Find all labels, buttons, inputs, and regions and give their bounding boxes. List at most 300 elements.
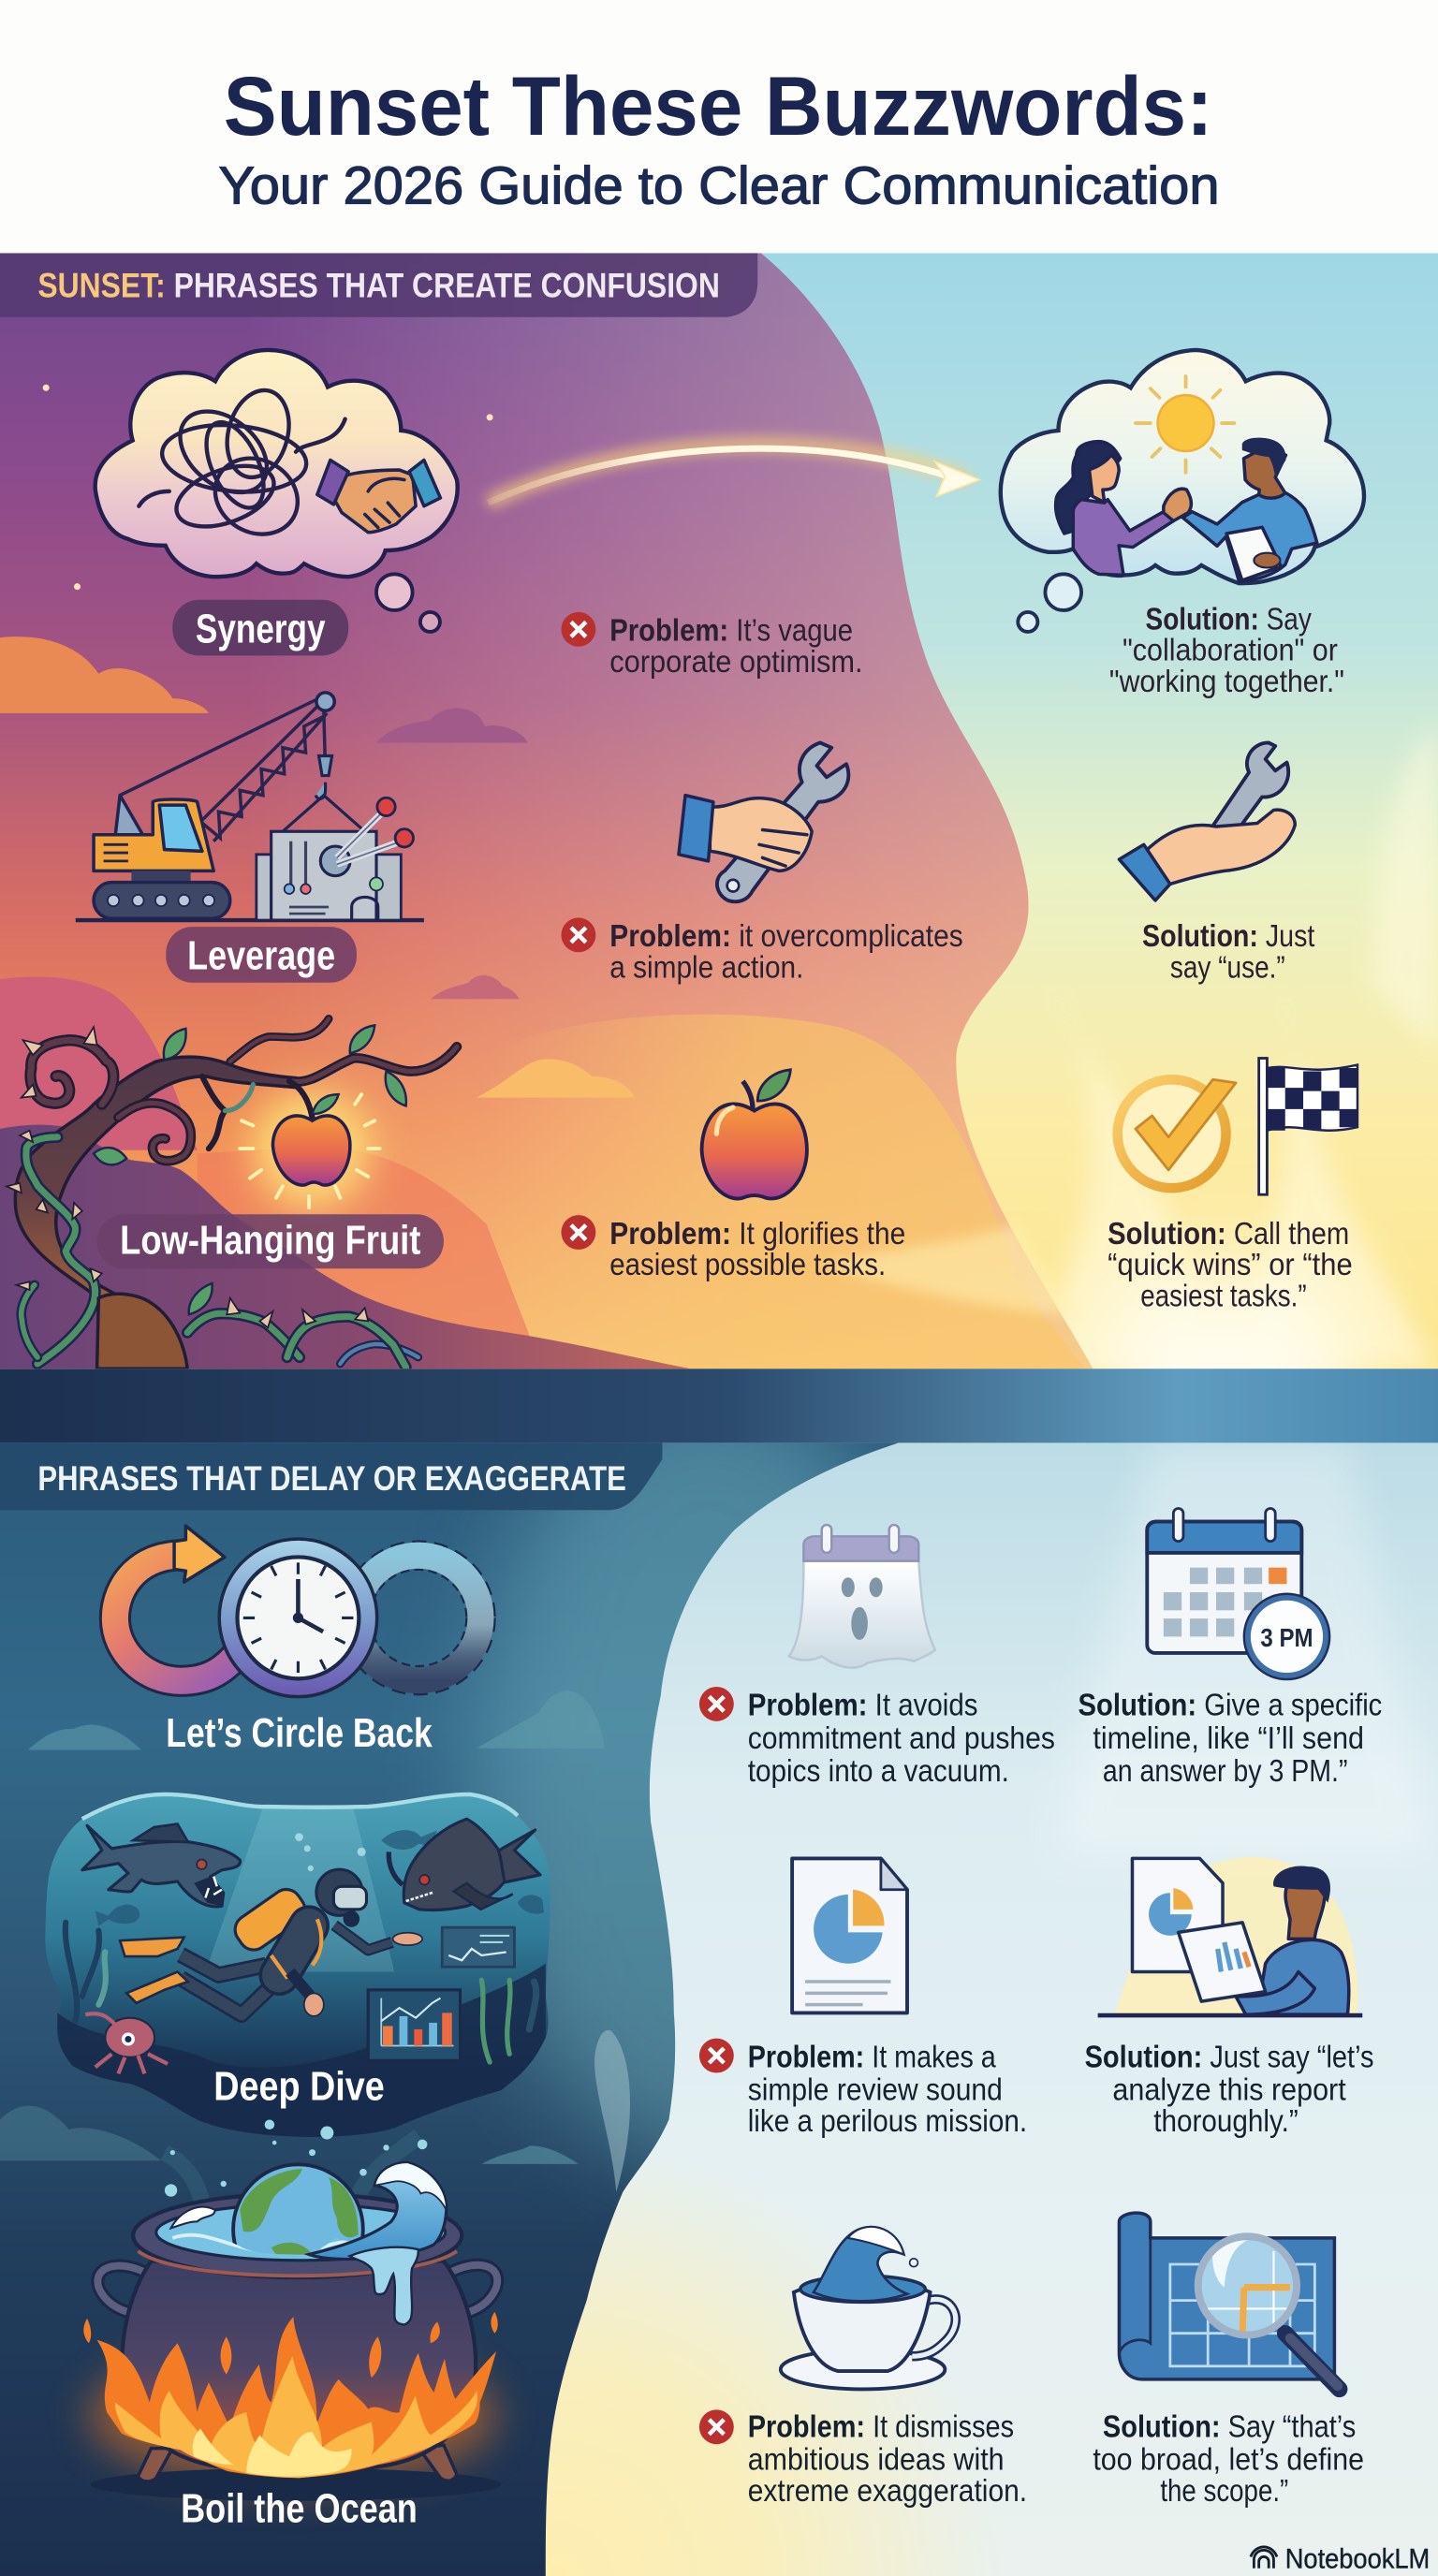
fin one xyxy=(120,1938,184,1956)
arrow head xyxy=(174,1526,225,1582)
cloud: orange left xyxy=(0,637,209,713)
apple highlight xyxy=(716,1107,733,1134)
lower hand xyxy=(304,1993,324,2016)
seaweed xyxy=(66,1923,536,2062)
torso outline xyxy=(279,1925,309,1975)
roots xyxy=(97,1294,187,1368)
leg two xyxy=(181,1979,279,2014)
apple glow xyxy=(253,1091,372,1209)
mouth xyxy=(406,1893,433,1901)
problem: deep dive xyxy=(699,2039,1027,2139)
x icon xyxy=(699,2409,734,2444)
line 2: a simple action. xyxy=(609,950,803,985)
icon: person analysing a report xyxy=(1098,1857,1362,2015)
fin two xyxy=(126,1972,188,2003)
green vine left xyxy=(187,1313,300,1357)
x icon xyxy=(561,1215,595,1250)
line 2: “quick wins” or “the xyxy=(1108,1248,1353,1282)
blue cuff xyxy=(409,461,440,506)
problem: boil the ocean xyxy=(699,2409,1027,2509)
glowing apple xyxy=(272,1116,350,1185)
line 3: easiest tasks.” xyxy=(1140,1280,1307,1314)
wrench ring xyxy=(727,880,739,892)
man body xyxy=(1182,493,1317,581)
background hill: purple xyxy=(0,1125,690,1368)
legs xyxy=(138,2445,457,2481)
cab window xyxy=(159,805,202,851)
line 2: commitment and pushes xyxy=(748,1721,1055,1756)
icon: storm in a teacup xyxy=(781,2227,956,2389)
water in cup xyxy=(800,2276,925,2302)
cuff xyxy=(679,796,713,861)
seabed xyxy=(57,1964,546,2137)
label: Boil the Ocean: Boil the Ocean xyxy=(181,2486,418,2532)
3 PM clock xyxy=(1244,1594,1329,1679)
small flame tongues xyxy=(83,2312,498,2378)
vine on trunk xyxy=(26,1137,95,1364)
magnifier handle inner xyxy=(1290,2338,1338,2386)
man head xyxy=(1244,446,1285,498)
lower fin xyxy=(453,1883,513,1910)
x icon xyxy=(561,917,595,952)
hand xyxy=(393,1933,422,1945)
control machine xyxy=(257,798,413,920)
logo: NotebookLM xyxy=(1251,2544,1430,2575)
date grid xyxy=(1164,1568,1262,1636)
cloud: yellow xyxy=(477,1059,635,1098)
left loop colour xyxy=(115,1555,239,1681)
icon: apple xyxy=(702,1070,807,1199)
flag field xyxy=(1267,1065,1357,1131)
line 2: too broad, let’s define xyxy=(1093,2442,1364,2477)
man xyxy=(1182,438,1317,581)
stem xyxy=(742,1081,753,1109)
regulator xyxy=(344,1910,360,1927)
line 1: Solution: Say xyxy=(1146,602,1312,637)
handles xyxy=(97,2265,497,2314)
leg two outline xyxy=(181,1979,279,2014)
arrow glow xyxy=(488,445,970,503)
left fish xyxy=(82,1824,241,1907)
problem: circle back xyxy=(699,1687,1055,1789)
teeth xyxy=(205,1877,222,1898)
binder rings xyxy=(1173,1508,1275,1542)
line 3: "working together." xyxy=(1109,665,1344,699)
handle xyxy=(912,2299,956,2356)
label text: Low-Hanging Fruit xyxy=(120,1217,421,1263)
crane mast xyxy=(115,796,144,838)
water swirls xyxy=(172,2235,419,2251)
big wave xyxy=(309,2162,447,2260)
cloud shape xyxy=(1001,350,1364,583)
crane cab xyxy=(94,799,213,871)
thought bubbles xyxy=(1018,574,1081,632)
problem: low-hanging fruit xyxy=(561,1215,905,1282)
saucer xyxy=(781,2349,945,2389)
page xyxy=(792,1858,907,2012)
bubbles xyxy=(165,2120,427,2197)
lens xyxy=(1198,2236,1297,2334)
thought bubbles xyxy=(376,574,440,632)
hook xyxy=(315,756,332,798)
side drop xyxy=(202,1076,225,1149)
icon: hand gripping wrench xyxy=(679,742,848,901)
body xyxy=(82,1825,241,1907)
label: Low-Hanging Fruit xyxy=(97,1214,444,1268)
calendar page xyxy=(1147,1522,1301,1653)
clasped hands xyxy=(1164,489,1191,520)
hanging vine xyxy=(225,1085,253,1111)
flames outer xyxy=(97,2317,496,2478)
line 1: Solution: Give a specific xyxy=(1078,1689,1382,1723)
flames inner xyxy=(193,2429,352,2477)
panel background: dark left side xyxy=(0,1442,899,2576)
rim underside glow xyxy=(138,2251,457,2276)
panel background: light right side xyxy=(0,1442,1438,2576)
line 2: timeline, like “I’ll send xyxy=(1093,1721,1364,1756)
torso xyxy=(279,1925,309,1975)
arrow line xyxy=(488,448,958,503)
blue vine xyxy=(340,1344,418,1364)
vines xyxy=(22,1137,95,1364)
wrench xyxy=(717,742,848,901)
line 3: thoroughly.” xyxy=(1153,2104,1299,2139)
branches xyxy=(31,1018,457,1161)
handle inner xyxy=(912,2299,956,2356)
held paper xyxy=(1179,1923,1266,2001)
trunk xyxy=(15,1057,299,1298)
flag pole xyxy=(1259,1059,1267,1194)
solution: boil the ocean xyxy=(1093,2409,1364,2509)
page fold xyxy=(881,1858,907,1890)
panel: sunset phrases that create confusion xyxy=(0,253,1438,1368)
calendar header xyxy=(1147,1522,1301,1553)
line 1: Problem: It dismisses xyxy=(748,2409,1014,2444)
fire glow xyxy=(87,2341,498,2489)
line 2: "collaboration" or xyxy=(1123,634,1338,668)
ground line xyxy=(76,919,424,921)
solution: deep dive xyxy=(1085,2040,1374,2139)
tank xyxy=(229,1883,311,1955)
icon: synergy thought cloud with tangle and handshake xyxy=(95,350,458,632)
problem text line 2: corporate optimism. xyxy=(609,645,863,680)
pill xyxy=(97,1214,444,1268)
leaf xyxy=(757,1070,790,1101)
mask xyxy=(333,1886,366,1910)
line 1: Solution: Say “that’s xyxy=(1103,2409,1356,2444)
lower curl xyxy=(118,1103,191,1161)
icon: looping arrow around clock xyxy=(115,1526,480,1697)
steam xyxy=(165,2136,419,2243)
pill xyxy=(166,927,357,983)
line 1: Solution: Just say “let’s xyxy=(1085,2040,1374,2074)
eye xyxy=(419,1875,430,1884)
ring xyxy=(1118,1079,1226,1188)
arrow xyxy=(488,445,979,503)
purple cuff xyxy=(317,461,348,505)
label text: Synergy xyxy=(196,606,326,651)
cuff xyxy=(1119,844,1170,900)
cloud shape xyxy=(95,350,458,577)
ghost body xyxy=(789,1561,935,1668)
problem: synergy xyxy=(561,612,863,680)
main title: Sunset These Buzzwords: xyxy=(224,59,1213,153)
line 2: say “use.” xyxy=(1170,950,1285,985)
problem: leverage xyxy=(561,917,963,985)
solution: synergy xyxy=(1109,602,1344,699)
decorative light rays xyxy=(1054,734,1438,1368)
line 1: Problem: It avoids xyxy=(748,1689,977,1723)
header background xyxy=(0,0,1438,253)
vine lower left xyxy=(22,1285,37,1357)
line 3: topics into a vacuum. xyxy=(748,1754,1009,1789)
flames middle xyxy=(115,2356,477,2478)
subtitle: Your 2026 Guide to Clear Communication xyxy=(218,156,1220,215)
label: Synergy xyxy=(172,600,348,655)
map sheet xyxy=(1119,2213,1334,2379)
fingers xyxy=(759,829,807,866)
sun xyxy=(1136,376,1234,473)
open hand xyxy=(1144,810,1295,884)
pie chart xyxy=(814,1890,884,1964)
ground vines xyxy=(187,1313,418,1368)
x icon xyxy=(561,612,595,647)
crane boom xyxy=(120,700,327,842)
horizon band xyxy=(0,1368,1438,1444)
icon: boiling cauldron over flames xyxy=(83,2162,501,2501)
ghost face xyxy=(842,1577,883,1640)
wisps lower right xyxy=(822,1224,1085,1314)
wrench xyxy=(1205,742,1288,842)
icon: checkered flag xyxy=(1259,1059,1357,1194)
icon: gold check mark xyxy=(1118,1079,1236,1188)
boom tip pulley xyxy=(316,693,334,710)
arm forward xyxy=(334,1925,392,1950)
calendar header xyxy=(803,1536,918,1561)
scribble tangle xyxy=(139,383,345,549)
line 1: Problem: It glorifies the xyxy=(609,1217,905,1251)
woman body xyxy=(1073,500,1173,575)
flames xyxy=(83,2312,498,2478)
wisp xyxy=(594,2030,630,2192)
leg one xyxy=(181,1954,266,1975)
x icon xyxy=(699,2039,734,2072)
hands xyxy=(335,470,416,533)
icon: deep dive scene xyxy=(45,1794,550,2137)
text lines xyxy=(805,1982,890,2005)
label: Let's Circle Back: Let’s Circle Back xyxy=(166,1710,433,1756)
head xyxy=(316,1869,362,1915)
crane tracks xyxy=(94,883,230,918)
thorns xyxy=(7,1027,368,1327)
cab vents xyxy=(104,844,128,861)
label text: Leverage xyxy=(187,933,335,979)
dorsal fin xyxy=(133,1824,188,1842)
section banner xyxy=(0,1442,662,1510)
eye xyxy=(197,1859,207,1869)
line 1: Solution: Call them xyxy=(1108,1217,1349,1251)
line 3: the scope.” xyxy=(1160,2474,1288,2509)
icon: ghost calendar xyxy=(789,1525,935,1668)
small wave crest xyxy=(171,2207,215,2228)
jaw and teeth xyxy=(194,1877,224,1906)
table line xyxy=(1098,2014,1362,2016)
cables to machine xyxy=(283,796,365,831)
x icon xyxy=(699,1687,734,1721)
woman hair xyxy=(1056,442,1121,534)
hand xyxy=(710,798,812,871)
banner shape xyxy=(0,253,757,317)
icon: map with magnifying glass xyxy=(1119,2213,1340,2389)
line 2: analyze this report xyxy=(1112,2072,1346,2107)
handshake xyxy=(317,461,440,533)
label: Leverage xyxy=(166,927,357,983)
held paper xyxy=(1226,527,1281,580)
arm forward fill xyxy=(334,1925,392,1950)
highlighted date xyxy=(1269,1568,1287,1584)
check xyxy=(1136,1079,1236,1170)
section banner xyxy=(0,253,757,317)
warm backdrop xyxy=(1114,1857,1357,2014)
sunset highlight xyxy=(332,253,1093,1368)
wave xyxy=(814,2227,907,2301)
small screen xyxy=(442,1927,514,1967)
icon: calendar with 3 PM clock xyxy=(1147,1508,1329,1679)
line 1: Problem: it overcomplicates xyxy=(609,919,963,954)
light rays xyxy=(1051,1442,1438,1857)
icon: open hand with wrench xyxy=(1119,742,1295,900)
apple body xyxy=(702,1104,807,1199)
cloud: purple lower xyxy=(431,975,520,999)
title block xyxy=(218,59,1220,215)
bubbles xyxy=(295,1833,366,1884)
report page xyxy=(1132,1858,1223,1972)
tail xyxy=(496,1830,540,1883)
apple stem branch xyxy=(289,1081,313,1118)
right branch xyxy=(292,1046,457,1082)
droplet xyxy=(910,2259,917,2267)
line 1: Problem: It makes a xyxy=(748,2040,996,2074)
solution: low-hanging fruit xyxy=(1108,1217,1353,1314)
background clouds xyxy=(0,1690,605,2164)
leaves xyxy=(94,1025,406,1314)
panel background: sky right side xyxy=(0,253,1438,1368)
background hill: amber xyxy=(564,1015,1084,1368)
ground shadow xyxy=(91,2468,501,2501)
solution: circle back xyxy=(1078,1689,1382,1789)
warm glow at bottom xyxy=(115,2131,1003,2576)
background hill: peach xyxy=(198,1148,542,1368)
squid xyxy=(85,2013,168,2073)
holding hand xyxy=(1254,553,1280,568)
3 PM clock: 3 PM xyxy=(1260,1623,1313,1652)
label: Deep Dive: Deep Dive xyxy=(213,2063,385,2109)
line 2: easiest possible tasks. xyxy=(609,1248,886,1282)
logo mark xyxy=(1251,2547,1277,2569)
binder rings xyxy=(822,1525,899,1553)
solution: leverage xyxy=(1142,919,1315,985)
woman face xyxy=(1089,455,1119,503)
magnifier handle xyxy=(1285,2334,1340,2389)
man hair xyxy=(1242,438,1286,476)
pie xyxy=(1149,1888,1193,1936)
panel: phrases that delay or exaggerate xyxy=(0,1381,1438,2576)
bar chart xyxy=(368,1990,461,2060)
right ring fill xyxy=(356,1556,480,1680)
lens contents xyxy=(1208,2235,1290,2334)
top curl xyxy=(31,1040,113,1105)
left side highlight xyxy=(477,1381,937,2169)
bottom sun glow xyxy=(1064,1203,1414,1368)
person torso xyxy=(1257,1939,1349,2014)
icon: thorny tree with glowing apple xyxy=(7,1018,457,1368)
background hill: magenta xyxy=(0,977,198,1150)
line 2: ambitious ideas with xyxy=(748,2442,1005,2477)
glow rays xyxy=(240,1094,380,1208)
right ring outline xyxy=(356,1556,480,1680)
harness xyxy=(271,1919,321,1979)
water xyxy=(156,2204,446,2261)
fingers xyxy=(365,478,404,527)
background silhouettes xyxy=(95,1830,544,1925)
icon: solution thought cloud xyxy=(1001,350,1364,632)
banner text: PHRASES THAT DELAY OR EXAGGERATE xyxy=(37,1459,626,1498)
body xyxy=(404,1819,505,1910)
arrow head xyxy=(935,461,979,496)
leg one outline xyxy=(181,1954,266,1975)
cloud: purple small xyxy=(376,708,527,742)
banner shape xyxy=(0,1442,662,1510)
woman xyxy=(1056,442,1173,575)
problem text: Problem: It’s vague xyxy=(609,614,853,649)
arm down xyxy=(290,1972,311,1997)
map grid xyxy=(1170,2264,1314,2366)
line 1: Solution: Just xyxy=(1142,919,1315,954)
forearm xyxy=(1236,1972,1314,2014)
person head xyxy=(1285,1875,1325,1939)
pot rim xyxy=(133,2194,462,2277)
icon: crane and control machine xyxy=(76,693,424,920)
horn fin xyxy=(389,1852,403,1884)
drip xyxy=(349,2247,418,2325)
line 3: an answer by 3 PM.” xyxy=(1103,1754,1347,1789)
clock xyxy=(219,1539,377,1697)
green vine right xyxy=(287,1317,406,1368)
line 3: extreme exaggeration. xyxy=(748,2474,1027,2509)
water blob xyxy=(45,1794,550,2137)
flag squares xyxy=(1267,1068,1357,1131)
line 3: like a perilous mission. xyxy=(748,2104,1027,2139)
handles inner xyxy=(97,2265,497,2314)
right fish xyxy=(389,1819,540,1910)
banner text: SUNSET: PHRASES THAT CREATE CONFUSION xyxy=(37,267,720,305)
water surface xyxy=(82,1794,518,1819)
icon: document with pie chart xyxy=(792,1858,907,2012)
light shafts xyxy=(205,1808,394,1972)
map fold xyxy=(1119,2238,1151,2353)
upper twig xyxy=(230,1018,329,1061)
stars xyxy=(43,385,493,590)
pill xyxy=(172,600,348,655)
diver xyxy=(120,1869,422,2016)
line 2: simple review sound xyxy=(748,2072,1003,2107)
lens rim xyxy=(1198,2236,1297,2334)
hair xyxy=(1273,1866,1330,1903)
crane base xyxy=(131,871,191,884)
cup xyxy=(794,2280,931,2371)
rising bubbles and steam xyxy=(165,2120,427,2243)
globe xyxy=(233,2164,363,2294)
